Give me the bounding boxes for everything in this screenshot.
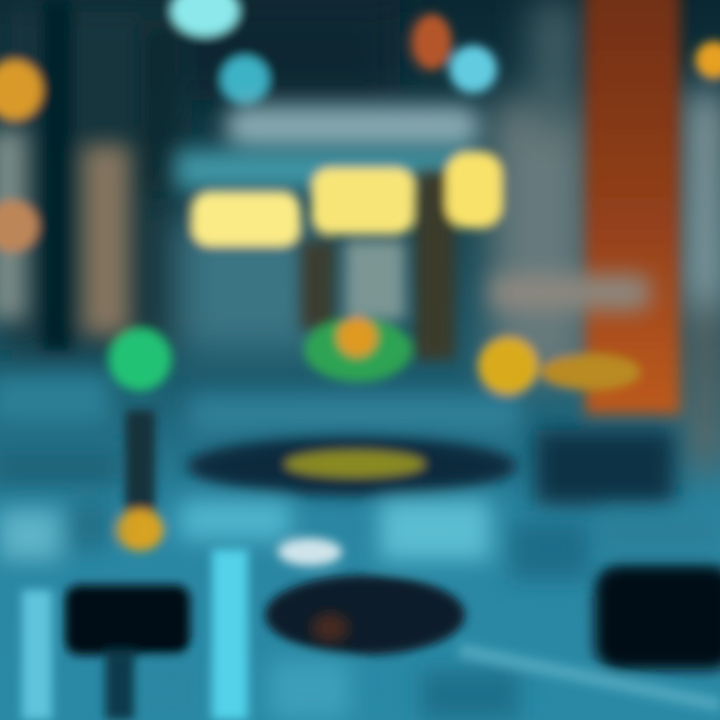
- dark pill: [187, 436, 517, 496]
- orange lamp: [412, 14, 452, 70]
- orange column: [585, 0, 680, 415]
- amber lamp left: [0, 60, 42, 120]
- cyan lamp middle: [221, 56, 269, 104]
- diagonal reflection: [460, 650, 720, 705]
- dark stem: [105, 650, 135, 720]
- storefront pillars: [300, 170, 455, 360]
- pale left column: [0, 130, 26, 320]
- white highlight: [278, 538, 342, 566]
- dark upper pillar: [140, 20, 180, 190]
- lower mottled patches: [0, 500, 720, 720]
- bright water centre: [212, 550, 248, 720]
- dark bottom left: [65, 585, 190, 655]
- right dark blocks: [535, 430, 675, 505]
- yellow sign centre: [312, 168, 414, 234]
- awning top band: [225, 105, 480, 149]
- yellow sign right: [446, 152, 502, 228]
- bright water left: [22, 590, 52, 720]
- teal counter band: [0, 375, 520, 485]
- faded lettering right: [490, 275, 650, 310]
- green marker: [109, 329, 171, 391]
- backdrop: building columns: [0, 0, 720, 470]
- tan column: [82, 145, 130, 335]
- yellow post base: [116, 509, 164, 551]
- olive pill lettering: [285, 451, 425, 477]
- amber label: [540, 354, 640, 390]
- dark left pillar: [42, 0, 72, 350]
- orange centre: [337, 317, 377, 357]
- peach lamp left: [0, 200, 38, 252]
- dark bottom centre: [265, 575, 465, 655]
- ember in centre: [312, 614, 348, 642]
- cyan lamp right: [449, 45, 497, 93]
- green ring: [304, 318, 412, 382]
- yellow sign left: [192, 192, 300, 246]
- amber lamp far right: [695, 41, 720, 79]
- dark post: [125, 410, 155, 515]
- cyan lamp top: [171, 0, 239, 36]
- teal awning: [175, 150, 475, 190]
- dark bottom right: [595, 565, 720, 670]
- yellow marker: [478, 337, 538, 395]
